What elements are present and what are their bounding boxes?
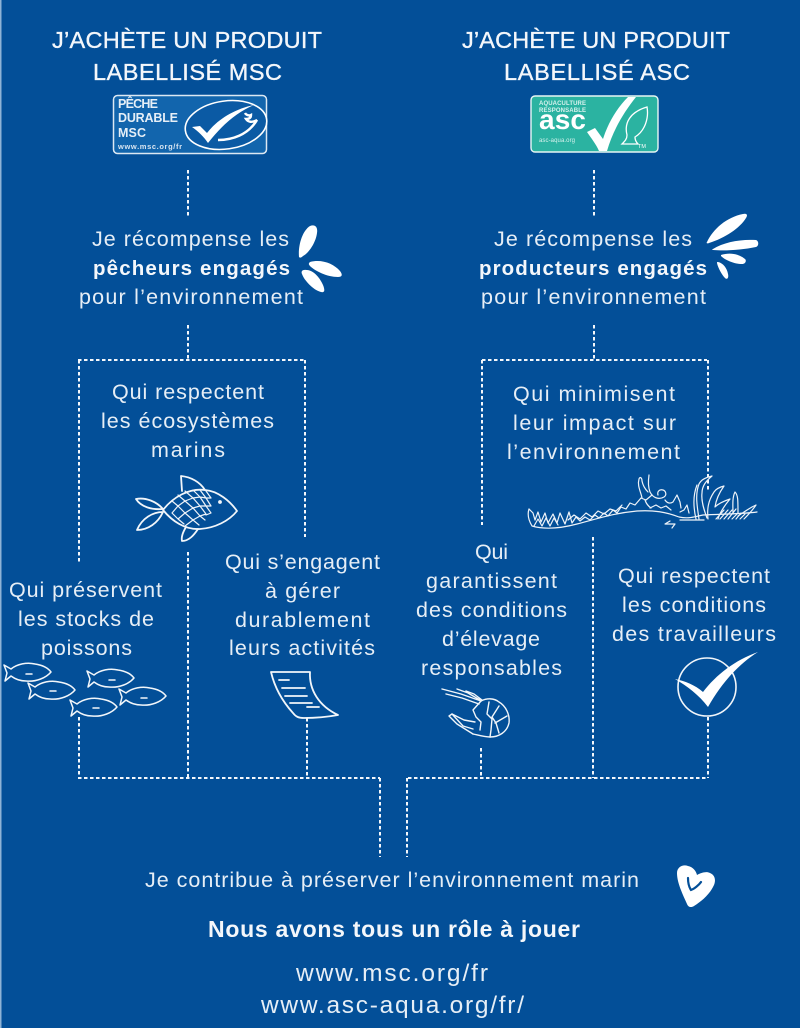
icon: shrimp [442, 689, 509, 737]
icon: heart [677, 865, 715, 907]
text: minimise environmental impact: leur impact sur [513, 411, 676, 435]
icon: check in circle [675, 652, 758, 716]
heading: ASC: J’ACHÈTE UN PRODUIT [462, 27, 730, 53]
text: guarantee farming conditions: responsables [421, 656, 562, 680]
icon: seabed and seaweed [528, 475, 757, 528]
text: reward MSC fishers: pêcheurs engagés [93, 257, 290, 280]
text: respect marine ecosystems: Qui respectent [112, 380, 264, 404]
text: guarantee farming conditions: des conditions [416, 598, 567, 622]
dashed connector lines [78, 170, 708, 857]
heading: ASC [462, 27, 730, 85]
text: manage activities sustainably: durablement [235, 608, 370, 632]
text: reward MSC fishers [79, 227, 303, 309]
icon: document [271, 672, 338, 718]
text: respect marine ecosystems [101, 380, 274, 462]
logo: ASC label: AQUACULTURE [539, 101, 586, 107]
logo: MSC label: PÊCHE [118, 96, 158, 111]
text: manage activities sustainably: leurs activités [229, 636, 375, 660]
logo: MSC label: www.msc.org/fr [117, 142, 182, 151]
logo: ASC label [531, 96, 658, 152]
logo: ASC label: asc [539, 104, 586, 135]
text: reward MSC fishers: Je récompense les [92, 227, 289, 251]
logo: ASC label: asc-aqua.org [539, 138, 575, 144]
logo: MSC label: DURABLE [118, 111, 178, 125]
text: minimise environmental impact: l’environnement [507, 440, 680, 464]
logo: ASC label: TM [638, 144, 646, 150]
heading: ASC: LABELLISÉ ASC [504, 59, 690, 85]
text: reward ASC producers: pour l’environnement [481, 285, 706, 309]
text: website links: www.asc-aqua.org/fr/ [260, 992, 524, 1019]
heading: MSC: LABELLISÉ MSC [93, 59, 282, 85]
text: respect workers' conditions [612, 564, 776, 646]
text: preserve fish stocks: Qui préservent [9, 578, 162, 602]
text: respect workers' conditions: des travailleurs [612, 622, 776, 646]
logo: MSC label [114, 96, 270, 154]
text: reward MSC fishers: pour l’environnement [79, 285, 303, 309]
text: preserve fish stocks [9, 578, 162, 660]
text: preserve fish stocks: les stocks de [18, 607, 154, 631]
panel: MSC column header [52, 27, 322, 154]
icon: large fish [136, 476, 237, 541]
panel: ASC column header [462, 27, 730, 152]
heading: everyone has a role: Nous avons tous un rôle à jouer [208, 916, 580, 942]
text: preserve fish stocks: poissons [41, 636, 132, 660]
text: conclusion: Je contribue à préserver l’environnement marin [145, 868, 639, 892]
logo: ASC label: RESPONSABLE [539, 108, 586, 114]
text: reward ASC producers [479, 227, 707, 309]
text: reward ASC producers: producteurs engagés [479, 257, 707, 280]
icon: splash left [299, 225, 342, 292]
heading: MSC: J’ACHÈTE UN PRODUIT [52, 27, 322, 53]
text: manage activities sustainably: à gérer [265, 579, 340, 603]
text: minimise environmental impact [507, 382, 680, 464]
text: website links [260, 960, 524, 1019]
icon: splash right [707, 214, 758, 279]
text: respect marine ecosystems: marins [151, 438, 225, 462]
text: website links: www.msc.org/fr [295, 960, 488, 987]
text: manage activities sustainably: Qui s’engagent [225, 550, 380, 574]
text: guarantee farming conditions: garantissent [426, 569, 557, 593]
text: manage activities sustainably [225, 550, 380, 660]
text: guarantee farming conditions: d’élevage [442, 627, 540, 651]
text: guarantee farming conditions: Qui [475, 540, 508, 564]
text: respect workers' conditions: Qui respectent [618, 564, 770, 588]
text: minimise environmental impact: Qui minimisent [513, 382, 675, 406]
text: respect marine ecosystems: les écosystèmes [101, 409, 274, 433]
icon: school of fish [4, 663, 166, 716]
logo: MSC label: MSC [118, 126, 146, 140]
text: guarantee farming conditions [416, 540, 567, 680]
text: reward ASC producers: Je récompense les [494, 227, 692, 251]
text: respect workers' conditions: les conditions [622, 593, 766, 617]
heading: MSC [52, 27, 322, 85]
